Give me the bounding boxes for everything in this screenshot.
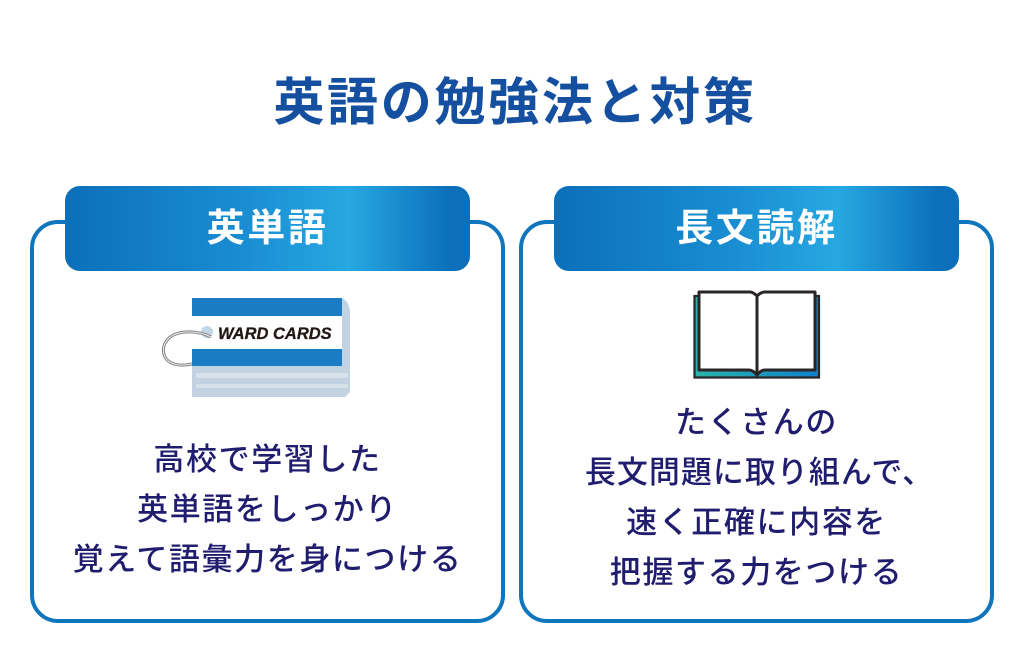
- title: 英語の勉強法と対策: [273, 74, 757, 131]
- heading: vocabulary: [65, 186, 470, 271]
- icon: word cards: WARD CARDS: [218, 325, 332, 343]
- text: vocabulary advice: 英単語をしっかり: [137, 492, 398, 527]
- text: vocabulary advice: 高校で学習した: [153, 442, 382, 477]
- heading: vocabulary: 英単語: [207, 208, 328, 250]
- heading: long-passage reading: 長文読解: [675, 208, 838, 250]
- icon: open book: [693, 290, 820, 379]
- text: reading advice: [585, 405, 934, 590]
- text: vocabulary advice: [73, 442, 462, 577]
- panel: long-passage reading: [519, 220, 994, 623]
- heading: long-passage reading: [554, 186, 959, 271]
- text: vocabulary advice: 覚えて語彙力を身につける: [73, 542, 462, 577]
- text: reading advice: 把握する力をつける: [610, 555, 903, 590]
- icon: word cards: [162, 298, 350, 397]
- text: reading advice: 長文問題に取り組んで、: [585, 455, 934, 490]
- text: reading advice: たくさんの: [675, 405, 838, 440]
- panel: vocabulary: [30, 220, 505, 623]
- text: reading advice: 速く正確に内容を: [626, 505, 887, 540]
